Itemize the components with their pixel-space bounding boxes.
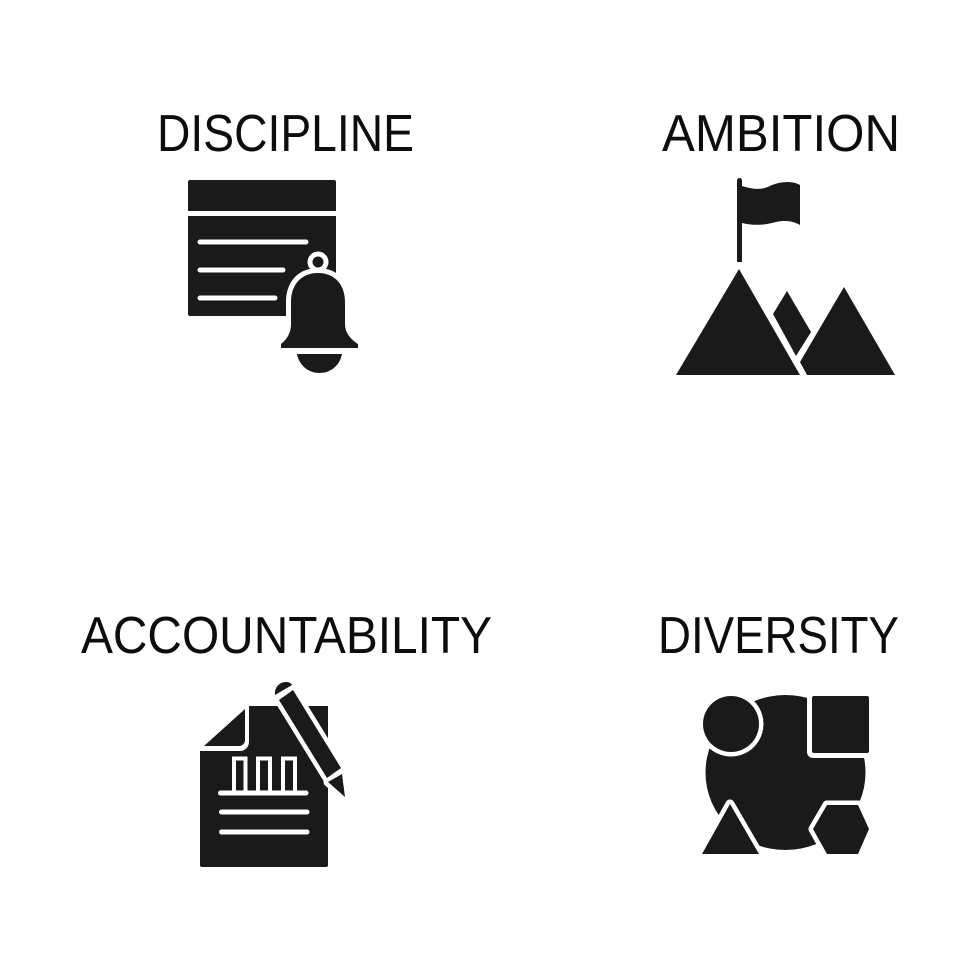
triangle — [702, 804, 759, 854]
panel: diversity — [658, 607, 899, 854]
icon: mountains with flag — [676, 178, 895, 375]
calendar body — [188, 216, 336, 316]
panel: ambition — [662, 105, 900, 375]
icon: document with chart and pencil — [200, 682, 345, 867]
left mountain — [676, 269, 800, 375]
flag — [742, 182, 800, 225]
panel: discipline — [157, 105, 414, 373]
large circle — [706, 695, 866, 850]
calendar header — [188, 180, 336, 211]
heading: discipline: DISCIPLINE — [157, 105, 414, 163]
icon: mixed shapes — [698, 691, 875, 854]
document — [200, 706, 328, 867]
heading: ambition: AMBITION — [662, 105, 900, 163]
icon: calendar with bell — [188, 180, 364, 373]
right mountain — [800, 287, 895, 375]
calendar lines — [200, 242, 306, 298]
panel: accountability — [81, 607, 492, 867]
heading: accountability: ACCOUNTABILITY — [81, 607, 492, 665]
document lines — [220, 793, 307, 832]
folded corner — [204, 709, 245, 746]
hexagon — [813, 805, 869, 854]
bar chart — [234, 758, 295, 792]
heading: diversity: DIVERSITY — [658, 607, 899, 665]
flag pole — [737, 178, 742, 262]
pencil — [275, 682, 345, 797]
bell — [275, 252, 364, 373]
middle peak — [773, 291, 811, 356]
small circle — [698, 692, 764, 756]
square — [807, 691, 875, 758]
